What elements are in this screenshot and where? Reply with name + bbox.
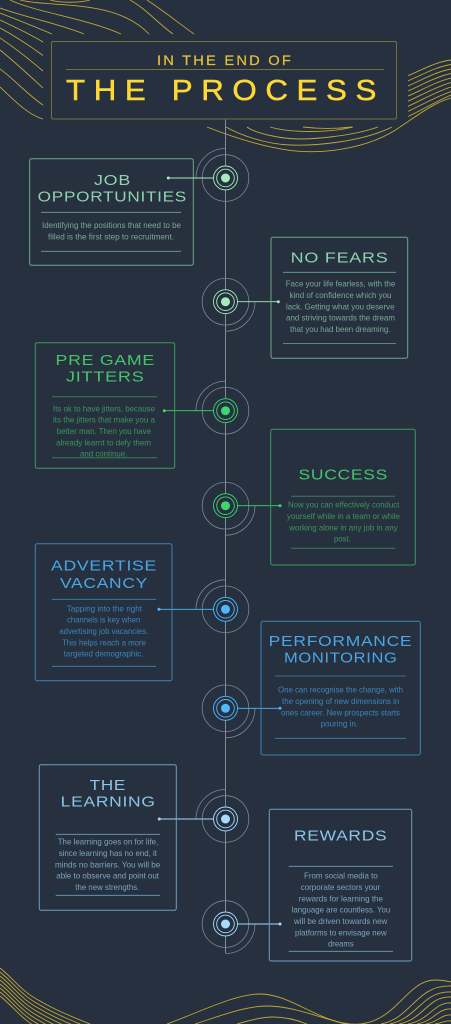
title banner — [52, 42, 396, 119]
panel: rewards — [269, 809, 412, 961]
panel: job opportunities: JOB — [94, 173, 131, 189]
node 1: job opportunities — [196, 148, 249, 201]
panel: performance monitoring: MONITORING — [284, 651, 398, 667]
node 6: performance monitoring — [202, 685, 282, 738]
panel: no fears — [271, 237, 408, 358]
decorative waves: top right — [207, 60, 451, 152]
node 3: pre game jitters — [163, 381, 249, 434]
panel: success: SUCCESS — [298, 468, 388, 484]
panel: advertise vacancy: channels is key when — [67, 615, 141, 625]
panel: the learning: since learning has no end, it — [59, 848, 158, 858]
panel: rewards: dreams — [328, 939, 354, 949]
node 7: the learning — [158, 790, 249, 842]
title frame — [52, 42, 396, 119]
panel: pre game jitters: PRE GAME — [56, 353, 155, 369]
panel: performance monitoring: ones career. New prospects starts — [281, 707, 400, 717]
panel: rewards: platforms to envisage new — [295, 927, 388, 937]
panel: pre game jitters: JITTERS — [66, 369, 144, 385]
panel: no fears: Face your life fearless, with the — [286, 279, 396, 289]
panel: performance monitoring: the opening of new dimensions in — [282, 696, 400, 706]
panel: the learning — [39, 765, 176, 910]
node 4: success — [202, 482, 282, 535]
panel: performance monitoring: pouring in. — [321, 719, 358, 729]
panel: advertise vacancy: targeted demographic. — [64, 649, 143, 659]
panel: rewards: From social media to — [304, 871, 378, 881]
panel: job opportunities: Identifying the positions that need to be — [42, 220, 181, 230]
panel: the learning: minds no barriers. You will be — [55, 859, 161, 869]
panel: pre game jitters: and continue. — [80, 449, 127, 459]
panel: success: post. — [334, 534, 351, 544]
panel: rewards: language are countless. You — [292, 905, 391, 915]
panel: rewards: rewards for learning the — [299, 893, 383, 903]
panel: no fears: lack. Getting what you deserve — [286, 301, 395, 311]
panel: success — [271, 429, 415, 565]
panel: the learning: able to observe and point out — [56, 871, 160, 881]
title line one: IN THE END OF — [157, 53, 293, 68]
node 8: rewards — [202, 901, 282, 954]
panel: the learning: the new strengths. — [75, 882, 139, 892]
panel: job opportunities: OPPORTUNITIES — [38, 190, 187, 206]
panel: the learning: LEARNING — [61, 794, 156, 810]
panel: job opportunities — [30, 159, 193, 265]
panel: advertise vacancy: ADVERTISE — [51, 559, 157, 575]
panel: performance monitoring: One can recognise the change, with — [278, 685, 403, 695]
panel: the learning: THE — [90, 778, 126, 794]
panel: pre game jitters: Its ok to have jitters, because — [53, 403, 155, 413]
decorative waves: bottom — [0, 968, 451, 1024]
node 5: advertise vacancy — [158, 580, 249, 633]
panel: success: yourself while in a team or while — [287, 511, 400, 521]
connector 1 — [167, 176, 214, 180]
panel: success: working alone in any job in any — [288, 522, 398, 532]
panel: rewards: will be driven towards new — [293, 916, 388, 926]
title line two: THE PROCESS — [66, 75, 385, 107]
panel: no fears: kind of confidence which you — [290, 290, 392, 300]
panel: pre game jitters — [35, 343, 175, 468]
panel: pre game jitters: its the jitters that make you a — [53, 415, 155, 425]
panel: no fears: that you had been dreaming. — [290, 324, 390, 334]
panel: pre game jitters: already learnt to defy them — [56, 437, 151, 447]
panel: performance monitoring — [261, 621, 420, 755]
panel: no fears: and striving towards the dream — [286, 313, 395, 323]
panel: rewards: corporate sectors your — [301, 882, 380, 892]
panel: advertise vacancy: VACANCY — [60, 576, 148, 592]
panel: rewards: REWARDS — [294, 829, 387, 845]
panel: job opportunities: filled is the first step to recruitment. — [48, 232, 174, 242]
decorative waves: top left — [0, 0, 194, 119]
panel: advertise vacancy — [35, 544, 172, 681]
panel: advertise vacancy: This helps reach a more — [62, 637, 146, 647]
panel: advertise vacancy: Tapping into the right — [67, 603, 143, 613]
panel: pre game jitters: better man. Then you have — [57, 426, 151, 436]
panel: no fears: NO FEARS — [291, 251, 388, 267]
central timeline line — [224, 119, 226, 953]
panel: the learning: The learning goes on for life, — [58, 837, 158, 847]
panel: advertise vacancy: advertising job vacancies. — [59, 626, 148, 636]
panel: success: Now you can effectively conduct — [288, 500, 400, 510]
panel: performance monitoring: PERFORMANCE — [269, 634, 412, 650]
node 2: no fears — [202, 278, 280, 331]
